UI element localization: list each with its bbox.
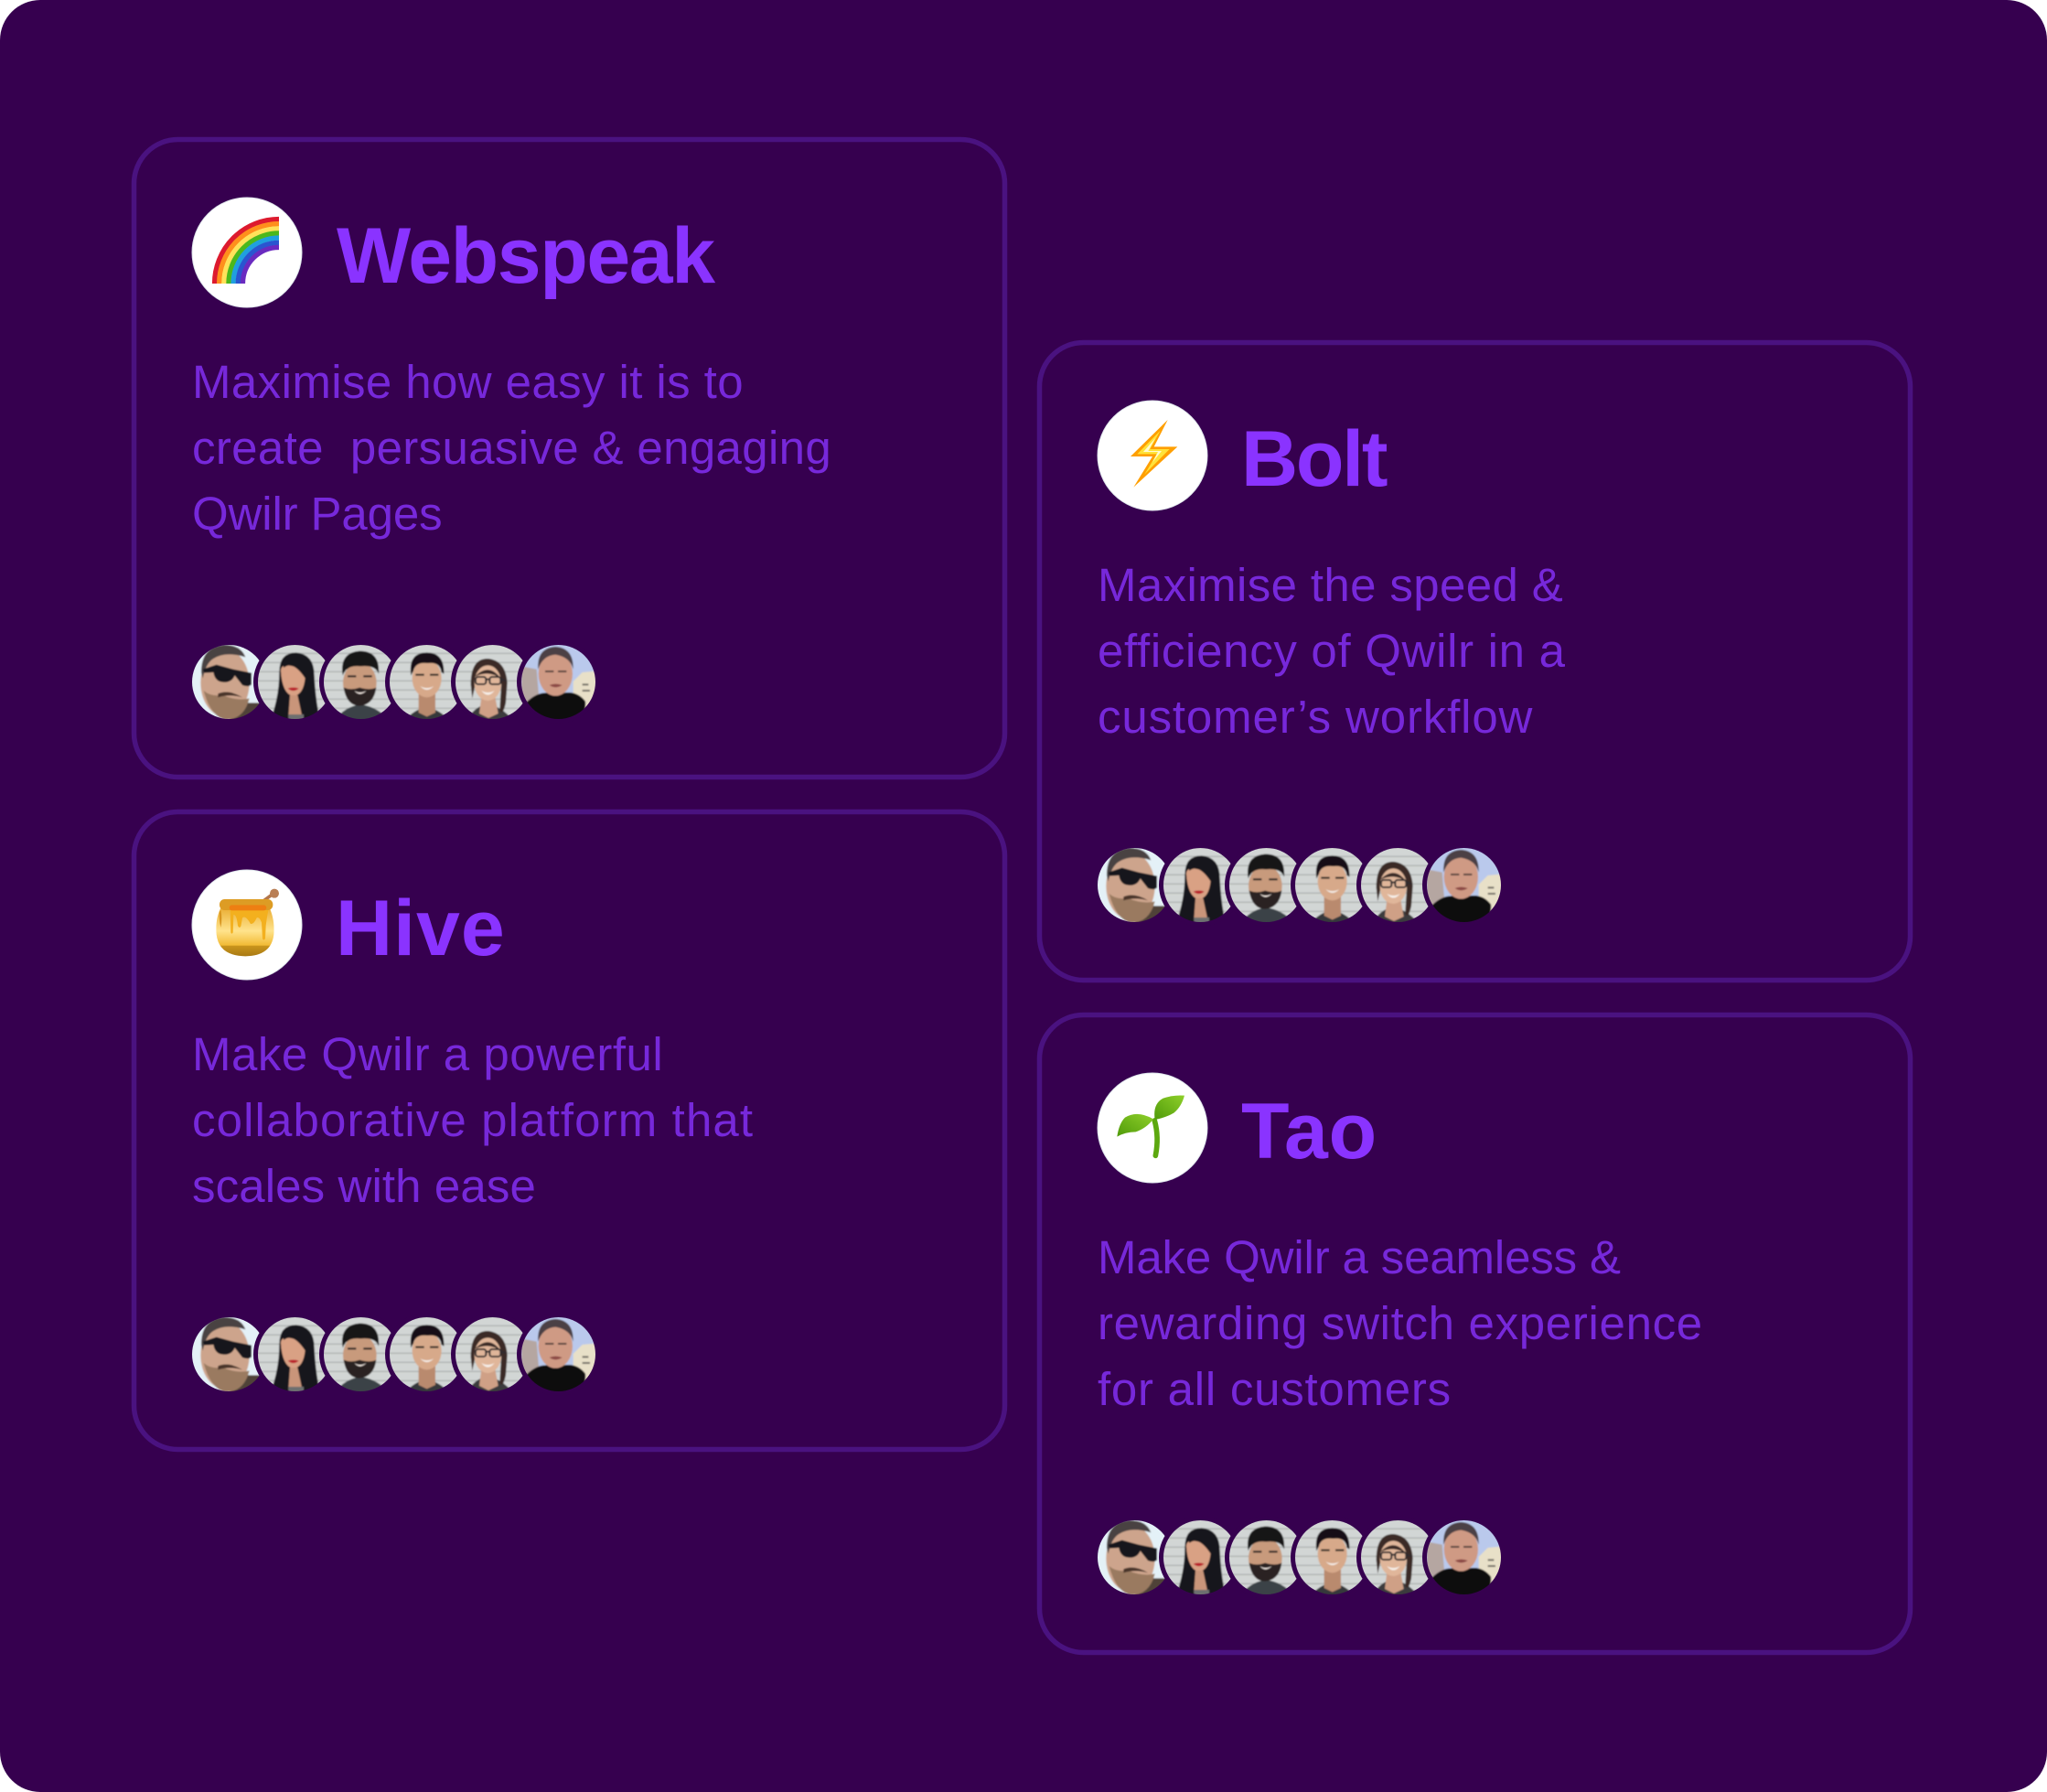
heading: Bolt: Bolt [1241, 415, 1388, 503]
icon: rainbow [192, 198, 302, 307]
description: Tao: rewarding switch experience [1098, 1297, 1703, 1349]
description: Bolt: efficiency of Qwilr in a [1098, 625, 1566, 677]
description: Bolt: Maximise the speed & [1098, 559, 1563, 611]
icon: lightning bolt [1098, 401, 1207, 510]
heading: Hive: Hive [336, 885, 506, 972]
description: Bolt: customer’s workflow [1098, 691, 1533, 743]
heading: Webspeak: Webspeak [337, 212, 715, 300]
description: Webspeak: Qwilr Pages [192, 488, 443, 540]
icon: seedling [1098, 1073, 1207, 1183]
panel: Hive [134, 812, 1004, 1449]
team avatars: Webspeak [189, 640, 600, 724]
description: Hive: scales with ease [192, 1160, 536, 1212]
team avatars: Hive [189, 1313, 600, 1396]
icon: honey pot [192, 870, 302, 980]
panel: Webspeak [134, 139, 1004, 778]
heading: Tao: Tao [1241, 1088, 1377, 1175]
panel: Tao [1039, 1015, 1910, 1652]
team avatars: Tao [1095, 1516, 1506, 1599]
description: Hive: Make Qwilr a powerful [192, 1028, 663, 1080]
description: Webspeak: Maximise how easy it is to [192, 356, 744, 408]
description: Tao: Make Qwilr a seamless & [1098, 1231, 1621, 1283]
description: Tao: for all customers [1098, 1363, 1452, 1415]
team avatars: Bolt [1095, 843, 1506, 927]
description: Hive: collaborative platform that [192, 1094, 754, 1146]
panel: Bolt [1039, 342, 1910, 981]
description: Webspeak: create persuasive & engaging [192, 422, 831, 474]
